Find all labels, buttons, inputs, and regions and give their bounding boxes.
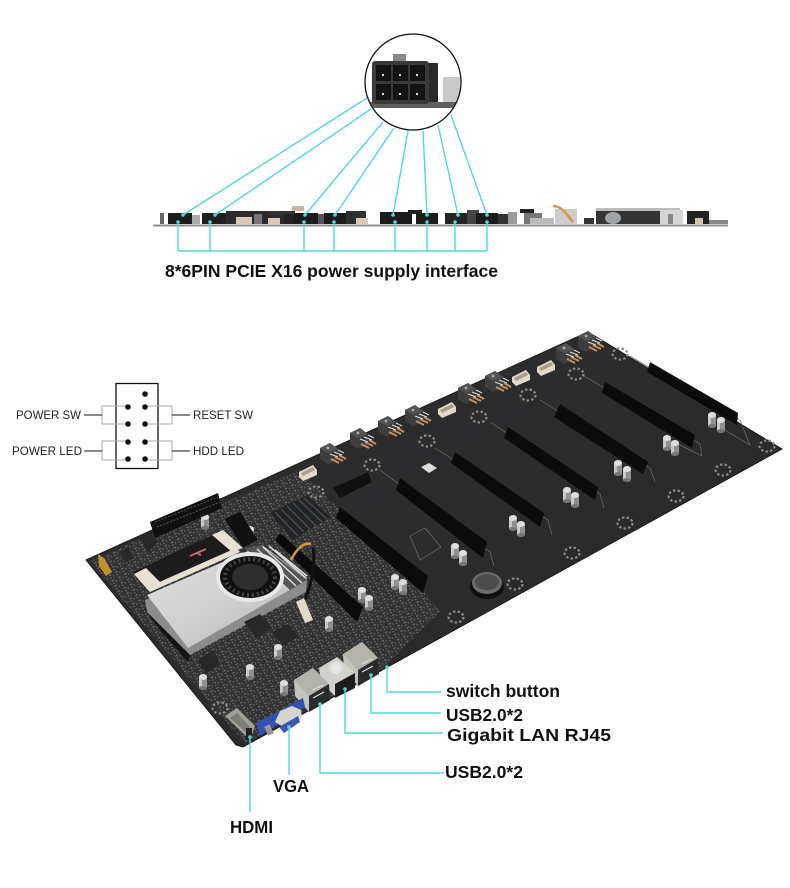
6-pin power connectors xyxy=(320,331,604,464)
panel: 6-pin power connector side view xyxy=(153,30,728,281)
label: power LED: POWER LED xyxy=(12,444,82,458)
bracket lines xyxy=(84,406,190,460)
label: HDD LED: HDD LED xyxy=(193,444,244,458)
pin header box xyxy=(116,384,158,468)
USB port left xyxy=(294,668,330,712)
dense component area xyxy=(90,470,440,744)
side view circuit board strip xyxy=(153,206,728,226)
label: USB lower: USB2.0*2 xyxy=(445,762,523,782)
switch and indicator xyxy=(98,554,112,576)
SO-DIMM slot xyxy=(133,530,243,592)
label: HDMI: HDMI xyxy=(230,817,273,837)
CPU heatsink xyxy=(270,495,330,540)
sticker xyxy=(421,463,437,473)
CMOS battery xyxy=(470,572,504,599)
panel: motherboard xyxy=(86,331,782,837)
dark side of graphics cooler xyxy=(145,595,192,662)
power inductors xyxy=(120,532,298,674)
label: switch button: switch button xyxy=(446,681,560,701)
label: USB upper: USB2.0*2 xyxy=(446,705,523,725)
label: reset switch: RESET SW xyxy=(193,408,254,422)
capacitors xyxy=(199,412,725,696)
label: gigabit LAN: Gigabit LAN RJ45 xyxy=(447,725,611,745)
silver graphics cooler with fan xyxy=(145,545,307,655)
connector leader lines xyxy=(176,98,489,251)
label: power switch: POWER SW xyxy=(16,408,82,422)
DVI connector xyxy=(225,708,255,740)
panel: front panel pin header xyxy=(12,384,254,468)
port leader lines xyxy=(248,665,444,812)
white headers xyxy=(299,360,555,481)
fan cable xyxy=(291,544,314,623)
header pins xyxy=(125,391,148,462)
label: VGA: VGA xyxy=(273,776,309,796)
magnified connector circle xyxy=(359,30,467,134)
M.2 slot xyxy=(333,472,372,498)
board outline xyxy=(86,332,782,747)
VGA connector xyxy=(256,698,305,736)
heading: power supply interface: 8*6PIN PCIE X16 power supply interface xyxy=(165,261,498,281)
LAN port xyxy=(319,657,355,698)
silkscreen slot outlines xyxy=(380,356,750,566)
USB port right xyxy=(343,642,379,686)
standoff holes xyxy=(212,348,774,714)
PCIe slots xyxy=(275,362,738,622)
24-pin ATX connector xyxy=(150,493,222,538)
SATA ports xyxy=(225,512,258,548)
